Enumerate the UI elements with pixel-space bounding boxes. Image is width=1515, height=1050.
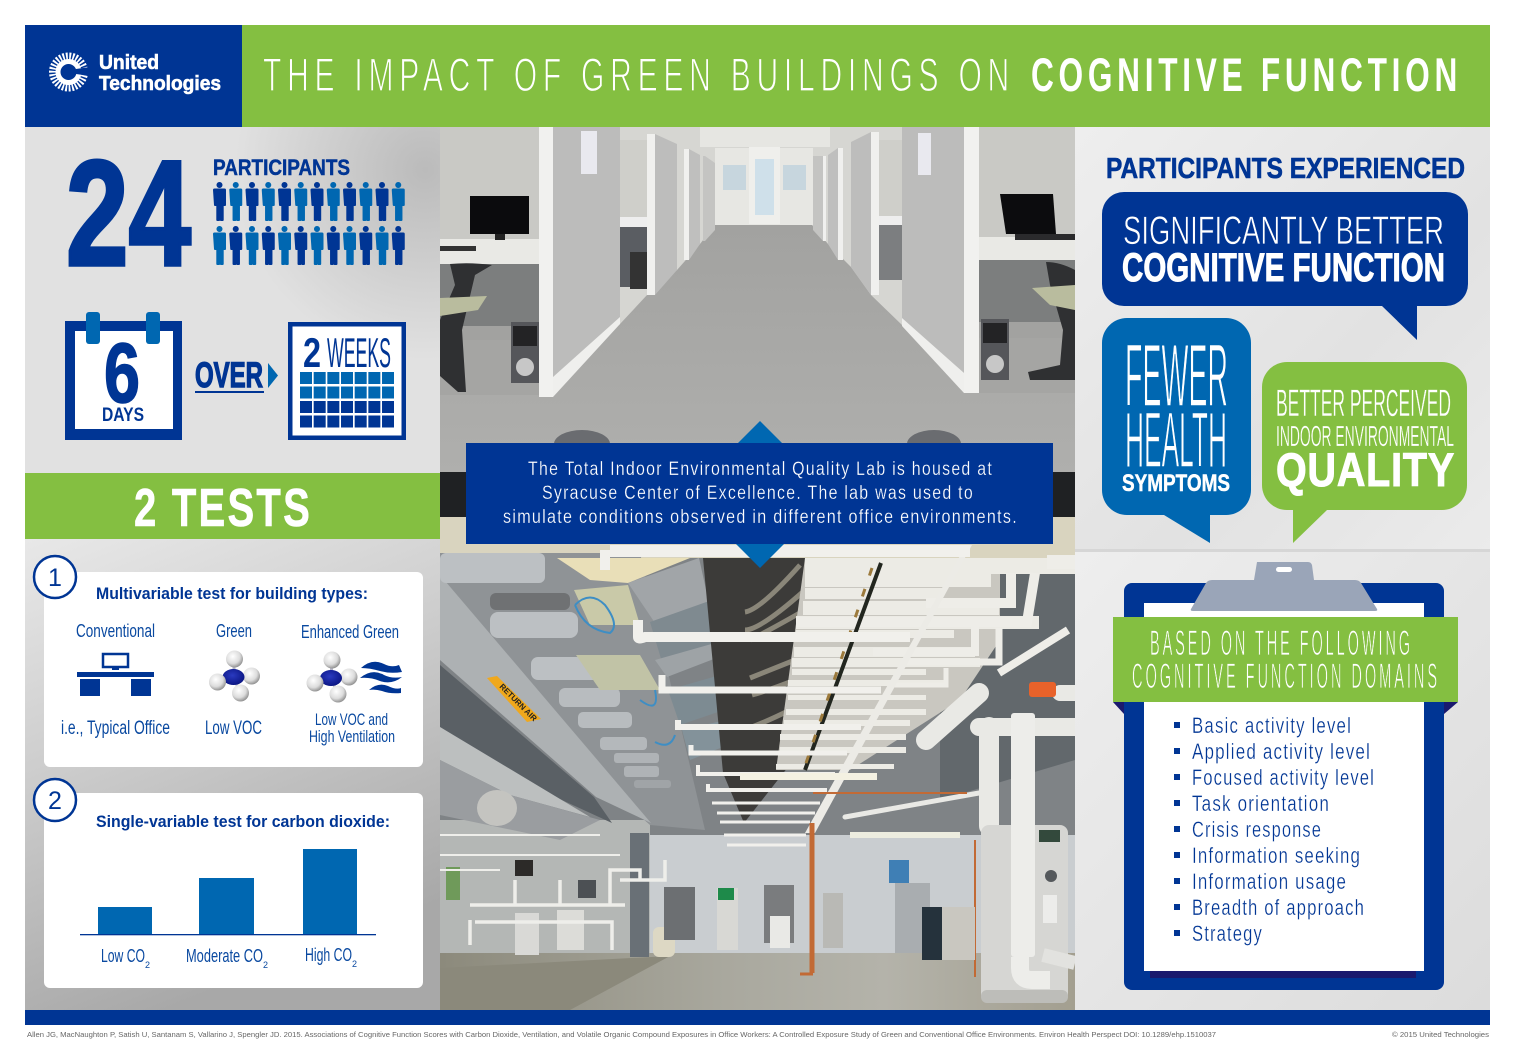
icon: molecule with air	[306, 652, 402, 702]
domain list: Task orientation	[1192, 791, 1330, 816]
icon: two week calendar	[288, 322, 406, 440]
header band	[25, 25, 1490, 127]
round ducts	[440, 553, 671, 788]
speech bubble: environmental quality: QUALITY	[1276, 443, 1455, 496]
domain list: Strategy	[1192, 921, 1263, 946]
footer bar	[25, 1010, 1490, 1025]
speech bubble: fewer health symptoms	[1102, 318, 1251, 543]
right bay	[979, 127, 1075, 240]
panel: outcomes: FEWER	[1125, 325, 1228, 425]
diagonal pipe	[805, 545, 972, 833]
lower left piping	[440, 835, 665, 950]
banner	[1113, 617, 1458, 702]
icon: calendar 6 days	[65, 312, 182, 440]
large insulated pipes	[845, 693, 1075, 826]
panel: outcomes: HEALTH	[1125, 395, 1227, 484]
domain list: Breadth of approach	[1192, 895, 1365, 920]
far partitions left	[703, 156, 715, 241]
number badge 1	[34, 556, 76, 598]
ceiling panel and VAV boxes	[557, 558, 690, 583]
logo: United Technologies: United	[99, 52, 159, 74]
number badge 1: 1	[48, 564, 62, 592]
stat: 24 participants: PARTICIPANTS	[213, 155, 350, 180]
icon: two week calendar: 2	[303, 329, 321, 376]
white pipe stack	[776, 558, 1000, 770]
panel: outcomes	[1075, 127, 1490, 552]
panel: cognitive domains	[1075, 552, 1490, 1010]
photo: office lab	[440, 127, 1075, 517]
panel: test 1	[34, 556, 423, 767]
callout: lab description: The Total Indoor Environmental Quality Lab is housed at	[528, 459, 993, 480]
copyright: © 2015 United Technologies	[1392, 1030, 1489, 1039]
label: typical office: i.e., Typical Office	[61, 718, 170, 739]
dark band between photos	[440, 472, 1075, 517]
domain list	[1174, 713, 1375, 946]
domain list: Basic activity level	[1192, 713, 1352, 738]
bar chart	[80, 849, 376, 970]
citation: Allen JG, MacNaughton P, Satish U, Santanam S, Vallarino J, Spengler JD. 2015. Associations of Cognitive Function Scores with Carbon Dioxide, Ventilation, and Volatile Organic Compound Exposures in Office Workers: A Controlled Exposure Study of Green and Conventional Office Environments. Environ Health Perspect DOI: 10.1289/ehp.1510037	[27, 1030, 1216, 1039]
floor	[440, 953, 1075, 1010]
icon: two week calendar: WEEKS	[327, 329, 391, 376]
banner folds	[1113, 702, 1458, 714]
speech bubble: cognitive function	[1102, 192, 1468, 340]
stat: 24 participants	[66, 129, 405, 297]
title: THE IMPACT OF GREEN BUILDINGS ON	[263, 48, 1015, 101]
domain list: Applied activity level	[1192, 739, 1371, 764]
label: low voc and high ventilation: Low VOC and	[315, 710, 388, 729]
return air label: RETURN AIR	[498, 682, 539, 723]
domain list: Information usage	[1192, 869, 1347, 894]
arrow: over: OVER	[195, 356, 263, 395]
sprinkler line	[805, 563, 881, 770]
icon: people row 2	[213, 226, 405, 265]
icon: molecule	[209, 650, 260, 702]
domain list: Focused activity level	[1192, 765, 1375, 790]
speech bubble: fewer health symptoms: SYMPTOMS	[1122, 470, 1230, 497]
icon: office desk	[77, 654, 154, 696]
speech bubble: environmental quality	[1262, 362, 1467, 543]
bar label: high	[305, 945, 357, 969]
callout: lab description: Syracuse Center of Excellence. The lab was used to	[542, 483, 974, 504]
light bars	[740, 773, 877, 780]
clipboard	[1124, 562, 1444, 990]
heading: 2 tests: 2 TESTS	[134, 478, 312, 538]
bar label: high: 2	[352, 959, 357, 969]
label: low voc: Low VOC	[205, 718, 262, 739]
copper pipes	[800, 793, 975, 977]
bar label: low: Low CO	[101, 946, 145, 966]
bar label: moderate	[186, 946, 268, 970]
logo: United Technologies: Technologies	[99, 73, 221, 95]
chair backs	[554, 430, 610, 458]
left bay	[440, 127, 539, 242]
callout: lab description: simulate conditions observed in different office environments.	[503, 507, 1018, 528]
panel: study design background	[25, 127, 440, 1010]
heading: 2 tests	[25, 473, 440, 539]
bar label: low: 2	[145, 960, 150, 970]
panel: test 2	[34, 779, 423, 988]
dark channel	[703, 558, 805, 823]
icon: calendar 6 days: DAYS	[102, 405, 144, 426]
bar label: moderate: Moderate CO	[186, 946, 263, 966]
blue wires	[575, 598, 675, 745]
water heater	[981, 713, 1075, 1003]
callout: lab description	[466, 421, 1053, 568]
back wall	[440, 835, 1075, 953]
icon: people row 1	[213, 182, 405, 221]
label: conventional: Conventional	[76, 621, 155, 641]
equipment row	[515, 833, 975, 960]
stat: 24 participants: 24	[66, 129, 191, 297]
return air label	[487, 676, 541, 723]
upper right pipes	[796, 562, 1075, 685]
label: low voc and high ventilation: High Ventilation	[309, 727, 395, 746]
heading: test 1: Multivariable test for building types:	[96, 585, 368, 603]
domain list: Information seeking	[1192, 843, 1361, 868]
number badge 2: 2	[48, 787, 62, 815]
photo: mechanical ceiling	[440, 517, 1075, 1010]
number badge 2	[34, 779, 76, 821]
far partitions right	[813, 156, 823, 241]
right ceiling dark	[940, 558, 1075, 800]
orange actuator	[1029, 682, 1056, 697]
label: low voc and high ventilation	[309, 710, 395, 746]
bar label: high: High CO	[305, 945, 352, 965]
logo: United Technologies	[54, 52, 221, 95]
icon: calendar 6 days: 6	[104, 326, 140, 420]
signs	[581, 131, 597, 174]
label: enhanced green: Enhanced Green	[301, 622, 399, 642]
bar label: moderate: 2	[263, 960, 268, 970]
duct bank backdrop	[440, 553, 705, 830]
floor	[440, 225, 1075, 472]
near partitions	[553, 127, 620, 384]
heading: test 2: Single-variable test for carbon dioxide:	[96, 813, 390, 831]
middle bays	[620, 140, 647, 217]
horizontal pipes	[605, 550, 970, 845]
bar label: low	[101, 946, 150, 970]
main duct	[440, 575, 651, 823]
label: green: Green	[216, 621, 252, 641]
back wall, door and windows	[715, 148, 813, 225]
domain list: Crisis response	[1192, 817, 1322, 842]
